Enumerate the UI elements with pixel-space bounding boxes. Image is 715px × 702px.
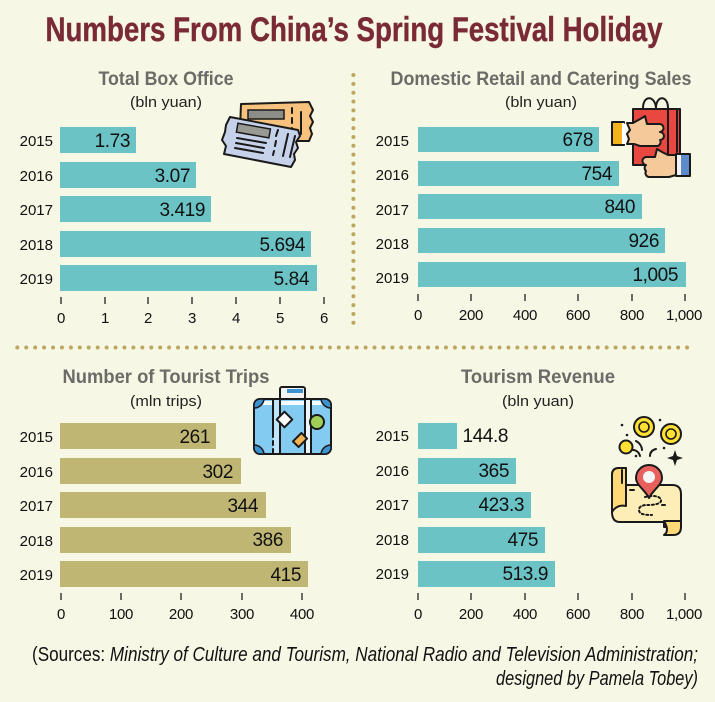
panel: total box office <box>20 69 328 327</box>
bar chart: retail sales: 754 <box>581 164 613 185</box>
bar chart: box office: 2018 <box>20 237 53 254</box>
bar chart: tourist trips: 415 <box>270 565 301 586</box>
bar chart: tourism revenue: 144.8 <box>462 426 508 447</box>
bar chart: tourist trips: 200 <box>169 606 193 623</box>
panel: tourism revenue <box>376 367 702 623</box>
bar chart: retail sales: 0 <box>414 307 422 324</box>
bar chart: retail sales: 200 <box>459 307 483 324</box>
bar chart: tourism revenue: 1,000 <box>666 606 702 623</box>
icon: map pin with coins <box>612 417 683 535</box>
bar chart: retail sales: 600 <box>566 307 590 324</box>
bar chart: tourist trips: 300 <box>230 606 254 623</box>
bar chart: box office: 4 <box>232 310 240 327</box>
bar chart: box office: 5 <box>276 310 284 327</box>
bar chart: box office: 6 <box>320 310 328 327</box>
bar chart: tourism revenue: 2019 <box>376 566 409 583</box>
bar chart: tourism revenue: 423.3 <box>478 495 524 516</box>
bar chart: box office: 5.694 <box>259 235 306 256</box>
bar chart: tourism revenue: 0 <box>414 606 422 623</box>
bar chart: tourism revenue: 2015 <box>376 428 409 445</box>
heading: tourist trips: Number of Tourist Trips <box>62 367 270 388</box>
bar chart: retail sales: 678 <box>562 130 593 151</box>
source note <box>32 644 698 690</box>
panel: domestic retail and catering sales <box>376 69 702 324</box>
bar chart: retail sales: 2019 <box>376 270 409 287</box>
bar chart: box office: 2015 <box>20 133 53 150</box>
unit label: (bln yuan) <box>502 393 574 410</box>
bar chart: box office: 0 <box>57 310 65 327</box>
bar chart: box office: 1 <box>101 310 109 327</box>
heading: total box office: Total Box Office <box>98 69 234 90</box>
bar chart: tourist trips: 261 <box>179 427 210 448</box>
bar chart: tourism revenue: 800 <box>620 606 644 623</box>
bar chart: tourist trips: 2018 <box>20 533 53 550</box>
bar chart: box office: 1.73 <box>95 131 130 152</box>
panel: number of tourist trips <box>20 367 331 623</box>
bar chart: box office: 3.419 <box>159 200 205 221</box>
bar chart: tourism revenue <box>376 423 702 623</box>
unit label: (bln yuan) <box>505 94 577 111</box>
bar chart: tourist trips: 2017 <box>20 498 53 515</box>
bar chart: tourist trips: 2019 <box>20 567 53 584</box>
bar chart: box office: 2019 <box>20 271 53 288</box>
bar chart: tourism revenue: 513.9 <box>502 564 548 585</box>
bar chart: tourist trips: 400 <box>290 606 314 623</box>
bar chart: retail sales: 1,000 <box>666 307 702 324</box>
bar chart: box office: 2 <box>144 310 152 327</box>
bar chart: tourist trips: 2015 <box>20 429 53 446</box>
bar chart: tourist trips: 302 <box>202 462 233 483</box>
icon: suitcase <box>254 387 331 454</box>
bar chart: tourist trips: 100 <box>109 606 133 623</box>
bar chart: box office: 3.07 <box>155 166 190 187</box>
bar chart: retail sales: 926 <box>628 231 659 252</box>
bar chart: retail sales: 2015 <box>376 133 409 150</box>
bar chart: tourism revenue: 365 <box>478 461 509 482</box>
bar chart: box office: 3 <box>188 310 196 327</box>
bar chart: tourism revenue: 2017 <box>376 497 409 514</box>
bar chart: box office: 2016 <box>20 168 53 185</box>
unit label: (bln yuan) <box>130 94 202 111</box>
bar chart: retail sales: 2018 <box>376 236 409 253</box>
bar chart: tourism revenue: 200 <box>459 606 483 623</box>
bar chart: box office <box>20 127 328 327</box>
bar chart: tourist trips: 344 <box>227 496 259 517</box>
bar chart: tourism revenue: 2016 <box>376 463 409 480</box>
bar chart: tourist trips: 0 <box>57 606 65 623</box>
bar chart: tourism revenue: 475 <box>507 530 538 551</box>
bar chart: tourist trips <box>20 423 314 623</box>
bar chart: retail sales: 2017 <box>376 202 409 219</box>
unit label: (mln trips) <box>130 393 202 410</box>
bar chart: box office: 5.84 <box>274 269 310 290</box>
icon: shopping bag with hands <box>612 98 690 177</box>
bar chart: retail sales: 2016 <box>376 167 409 184</box>
bar chart: retail sales: 400 <box>513 307 537 324</box>
bar chart: tourist trips: 2016 <box>20 464 53 481</box>
bar chart: tourist trips: 386 <box>252 530 283 551</box>
bar chart: tourism revenue: 400 <box>513 606 537 623</box>
bar chart: box office: 2017 <box>20 202 53 219</box>
bar chart: retail sales <box>376 127 702 324</box>
bar chart: retail sales: 800 <box>620 307 644 324</box>
bar chart: tourism revenue: 2018 <box>376 532 409 549</box>
heading: tourism revenue: Tourism Revenue <box>461 367 615 388</box>
bar chart: tourism revenue: 600 <box>566 606 590 623</box>
icon: cinema tickets <box>222 102 313 167</box>
bar chart: retail sales: 840 <box>604 197 635 218</box>
bar chart: retail sales: 1,005 <box>632 265 678 286</box>
heading: retail sales: Domestic Retail and Catering Sales <box>390 69 692 90</box>
